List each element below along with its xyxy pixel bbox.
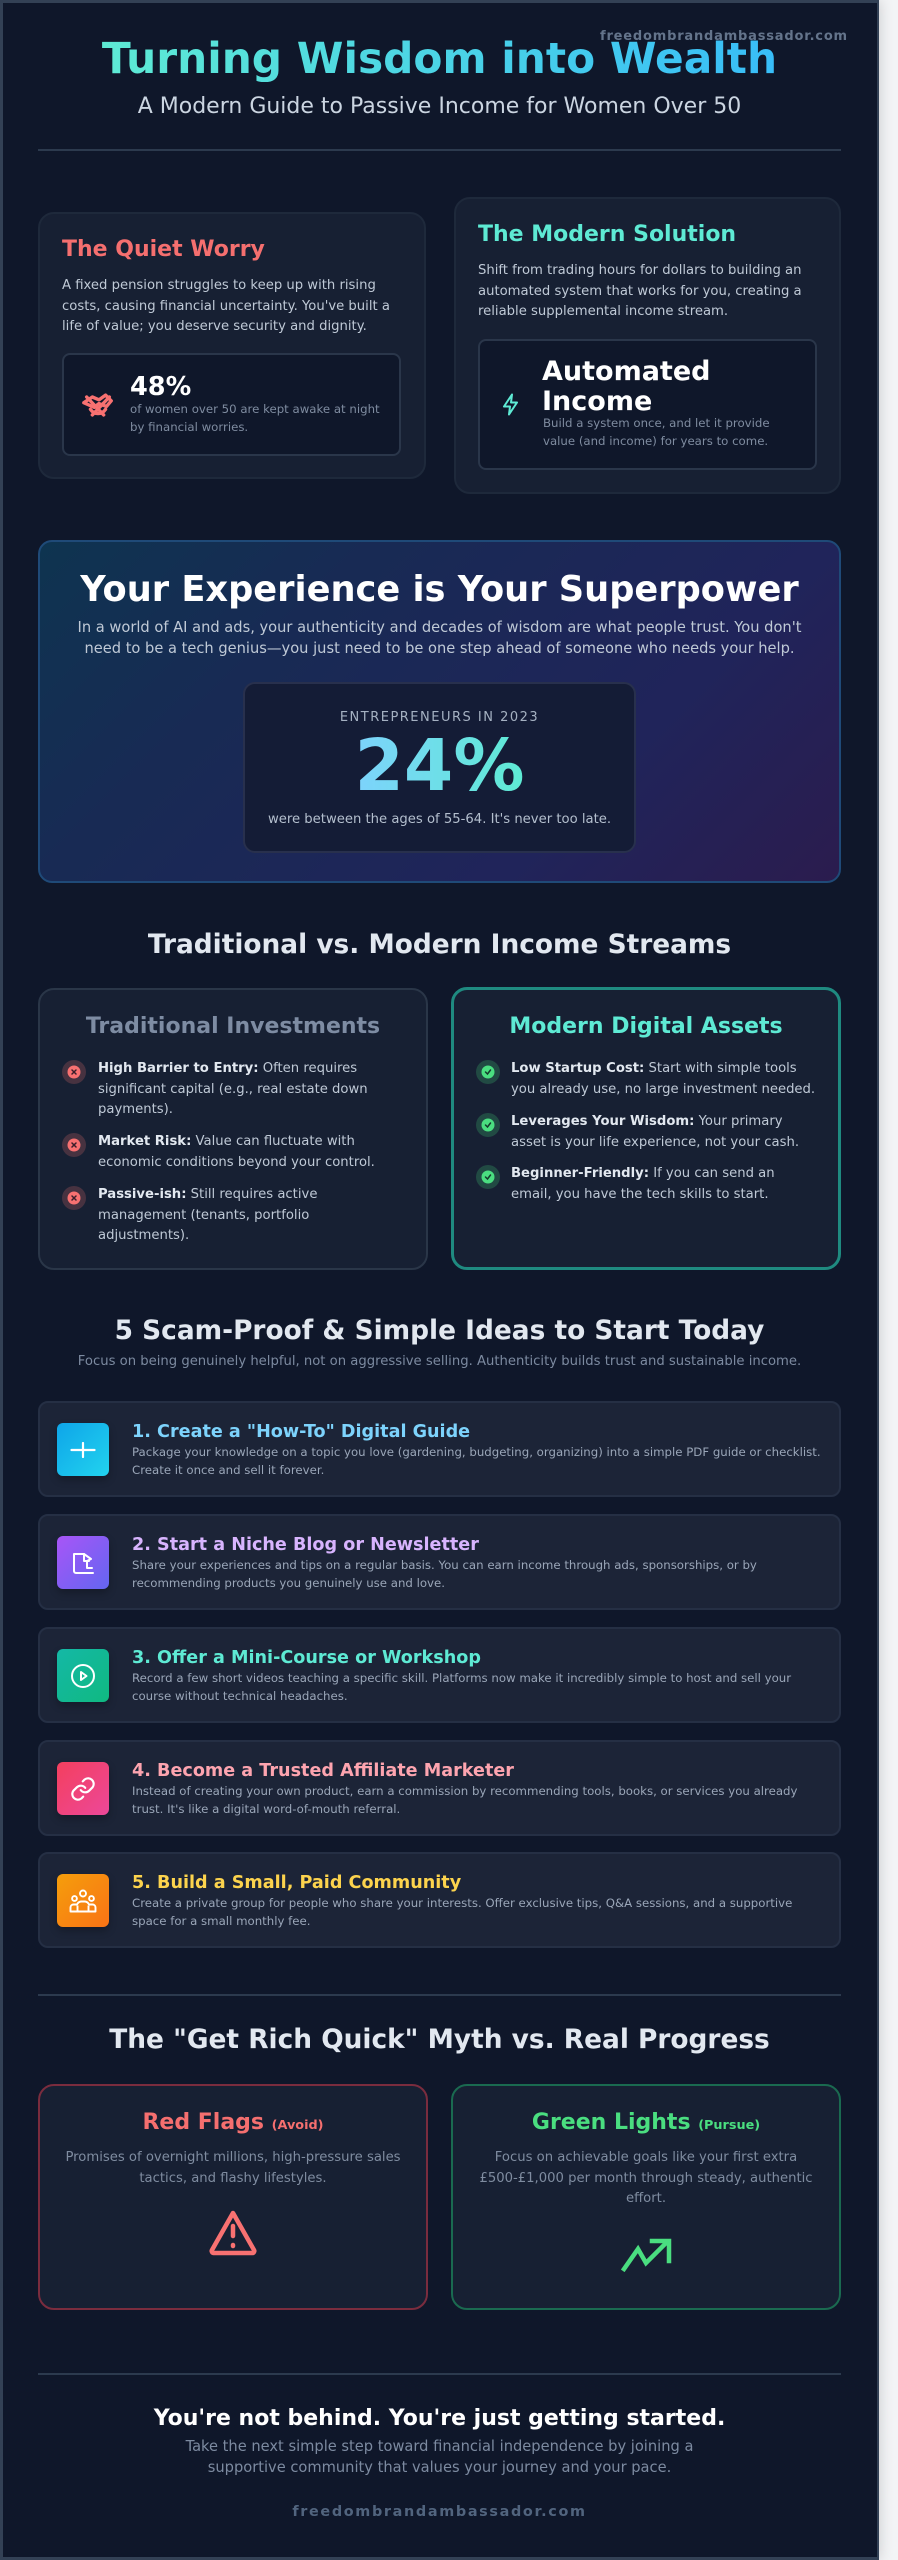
text: the quiet worry: A fixed pension struggles to keep up with rising xyxy=(62,278,376,293)
watermark url: freedombrandambassador.com xyxy=(600,29,848,44)
idea title: 4. Become a Trusted Affiliate Marketer xyxy=(132,1761,514,1781)
closing text: Take the next simple step toward financial independence by joining a xyxy=(186,2438,693,2455)
item: high barrier: payments). xyxy=(98,1102,173,1117)
stat description: were between the ages of 55-64. It's never too late. xyxy=(268,812,611,827)
heading: red flags: Red Flags (Avoid) xyxy=(142,2110,324,2135)
panel: the quiet worry xyxy=(38,212,426,479)
item: low startup cost xyxy=(511,1061,815,1096)
icon: play circle xyxy=(57,1649,109,1702)
list: modern benefits xyxy=(476,1060,815,1202)
label: entrepreneurs: ENTREPRENEURS IN 2023 xyxy=(340,710,539,725)
panel: green lights xyxy=(451,2084,841,2310)
idea title: 1. Create a "How-To" Digital Guide xyxy=(132,1422,470,1442)
idea description: course without technical headaches. xyxy=(132,1689,348,1703)
idea description: recommending products you genuinely use and love. xyxy=(132,1576,445,1590)
item: passive-ish: management (tenants, portfolio xyxy=(98,1208,309,1222)
item: leverages wisdom xyxy=(511,1114,799,1150)
idea card 2 xyxy=(38,1514,841,1610)
text: green lights: £500-£1,000 per month through steady, authentic xyxy=(479,2170,813,2186)
text: superpower: need to be a tech genius—you just need to be one step ahead of someone who needs your help. xyxy=(84,640,795,656)
text: the modern solution: reliable supplemental income stream. xyxy=(478,304,728,319)
stat description: value (and income) for years to come. xyxy=(543,434,768,448)
item: leverages wisdom: asset is your life experience, not your cash. xyxy=(511,1134,799,1150)
stat description: by financial worries. xyxy=(130,420,248,434)
item: market risk xyxy=(98,1134,375,1170)
item: leverages wisdom: Leverages Your Wisdom: Your primary xyxy=(511,1114,783,1129)
subtitle: A Modern Guide to Passive Income for Women Over 50 xyxy=(138,94,741,119)
idea description xyxy=(132,1896,792,1928)
idea title: 3. Offer a Mini-Course or Workshop xyxy=(132,1648,481,1668)
item: market risk: economic conditions beyond your control. xyxy=(98,1154,375,1170)
panel: modern digital assets xyxy=(451,987,841,1270)
icon: cross 3 xyxy=(62,1186,86,1210)
item: beginner-friendly xyxy=(511,1166,775,1202)
idea description xyxy=(132,1445,821,1477)
stat description: of women over 50 are kept awake at night xyxy=(130,402,380,416)
footer url: freedombrandambassador.com xyxy=(292,2504,587,2520)
idea card 1 xyxy=(38,1401,841,1497)
idea description: Share your experiences and tips on a regular basis. You can earn income through ads, sponsorships, or by xyxy=(132,1558,757,1572)
item: high barrier xyxy=(98,1061,368,1117)
icon: cross 1 xyxy=(62,1060,86,1084)
text: the modern solution xyxy=(478,263,802,319)
list: traditional drawbacks xyxy=(62,1060,375,1243)
idea description: Create it once and sell it forever. xyxy=(132,1463,324,1477)
text: the modern solution: Shift from trading hours for dollars to building an xyxy=(478,263,802,278)
text: green lights: Focus on achievable goals like your first extra xyxy=(495,2150,797,2165)
icon: warning triangle xyxy=(209,2210,257,2256)
item: high barrier: High Barrier to Entry: Often requires xyxy=(98,1061,357,1076)
closing text: supportive community that values your journey and your pace. xyxy=(208,2458,671,2476)
item: passive-ish: adjustments). xyxy=(98,1228,189,1243)
item: high barrier: significant capital (e.g., real estate down xyxy=(98,1082,368,1096)
item: low startup cost: Low Startup Cost: Start with simple tools xyxy=(511,1061,797,1076)
panel: red flags xyxy=(38,2084,428,2310)
stat value: 48%: 48% xyxy=(130,372,191,402)
panel: experience hero xyxy=(38,540,841,883)
text: the quiet worry: costs, causing financial uncertainty. You've built a xyxy=(62,298,390,314)
stat box: 48% xyxy=(62,353,401,456)
panel: traditional investments xyxy=(38,988,428,1270)
heading: traditional investments: Traditional Investments xyxy=(86,1014,380,1039)
idea card 4 xyxy=(38,1740,841,1836)
item: passive-ish xyxy=(98,1187,317,1243)
idea description xyxy=(132,1784,797,1816)
closing text xyxy=(186,2438,693,2476)
stat box: 24% xyxy=(243,682,636,853)
text: superpower: In a world of AI and ads, your authenticity and decades of wisdom are what people trust. You don't xyxy=(78,619,801,636)
icon: link xyxy=(57,1762,109,1815)
text: red flags xyxy=(65,2150,401,2186)
icon: plus xyxy=(57,1423,109,1476)
idea card 3 xyxy=(38,1627,841,1723)
stat description: Build a system once, and let it provide xyxy=(543,416,770,430)
idea description xyxy=(132,1671,792,1703)
idea card 5 xyxy=(38,1852,841,1948)
item: market risk: Market Risk: Value can fluctuate with xyxy=(98,1134,355,1149)
icon: lightning bolt xyxy=(502,394,518,416)
heading: five ideas: 5 Scam-Proof & Simple Ideas to Start Today xyxy=(115,1315,764,1346)
text: the modern solution: automated system that works for you, creating a xyxy=(478,284,802,298)
subheading: five ideas: Focus on being genuinely helpful, not on aggressive selling. Authenticity builds trust and sustainable income. xyxy=(78,1354,801,1369)
stat value: automated income: Automated xyxy=(542,356,710,387)
stat value: automated income: Income xyxy=(542,386,652,416)
text: green lights xyxy=(479,2150,813,2206)
heading: modern digital assets: Modern Digital Assets xyxy=(509,1014,783,1039)
stat value: automated income xyxy=(542,356,710,416)
idea description: trust. It's like a digital word-of-mouth referral. xyxy=(132,1802,400,1816)
icon: check 1 xyxy=(476,1060,500,1084)
idea title: 2. Start a Niche Blog or Newsletter xyxy=(132,1535,479,1555)
heading: the quiet worry: The Quiet Worry xyxy=(62,237,265,262)
text: red flags: tactics, and flashy lifestyles. xyxy=(139,2170,327,2186)
idea description: Package your knowledge on a topic you love (gardening, budgeting, organizing) into a simple PDF guide or checklist. xyxy=(132,1445,821,1459)
icon: check 3 xyxy=(476,1165,500,1189)
heading: the modern solution: The Modern Solution xyxy=(478,222,736,247)
idea description: Instead of creating your own product, earn a commission by recommending tools, books, or services you already xyxy=(132,1784,797,1798)
text: green lights: effort. xyxy=(626,2191,666,2206)
icon: sleepless worry xyxy=(82,393,113,417)
icon: check 2 xyxy=(476,1113,500,1137)
item: beginner-friendly: email, you have the tech skills to start. xyxy=(511,1186,769,1202)
panel: the modern solution xyxy=(454,197,841,494)
idea title: 5. Build a Small, Paid Community xyxy=(132,1873,461,1893)
item: passive-ish: Passive-ish: Still requires active xyxy=(98,1187,317,1202)
heading: green lights: Green Lights (Pursue) xyxy=(532,2110,760,2135)
heading: comparison: Traditional vs. Modern Income Streams xyxy=(148,929,731,960)
closing heading: You're not behind. You're just getting started. xyxy=(154,2406,725,2431)
stat description xyxy=(543,416,770,448)
heading: superpower: Your Experience is Your Superpower xyxy=(80,569,799,610)
idea description: Create a private group for people who share your interests. Offer exclusive tips, Q&A sessions, and a supportive xyxy=(132,1896,792,1910)
stat value: 24%: 24% xyxy=(355,724,524,807)
text: the quiet worry xyxy=(62,278,390,334)
stat description xyxy=(130,402,380,434)
idea description: space for a small monthly fee. xyxy=(132,1914,310,1928)
text: red flags: Promises of overnight millions, high-pressure sales xyxy=(65,2150,401,2165)
icon: community xyxy=(57,1874,109,1927)
heading: myth vs progress: The "Get Rich Quick" Myth vs. Real Progress xyxy=(109,2024,770,2055)
icon: cross 2 xyxy=(62,1133,86,1157)
text: the quiet worry: life of value; you deserve security and dignity. xyxy=(62,319,367,334)
item: low startup cost: you already use, no large investment needed. xyxy=(511,1082,815,1096)
stat box: automated income xyxy=(478,339,817,470)
icon: trending up xyxy=(621,2238,672,2272)
idea description: Record a few short videos teaching a specific skill. Platforms now make it incredibly simple to host and sell your xyxy=(132,1671,791,1685)
icon: document pen xyxy=(57,1536,109,1589)
text: superpower xyxy=(78,619,802,656)
idea description xyxy=(132,1558,757,1590)
item: beginner-friendly: Beginner-Friendly: If you can send an xyxy=(511,1166,775,1181)
